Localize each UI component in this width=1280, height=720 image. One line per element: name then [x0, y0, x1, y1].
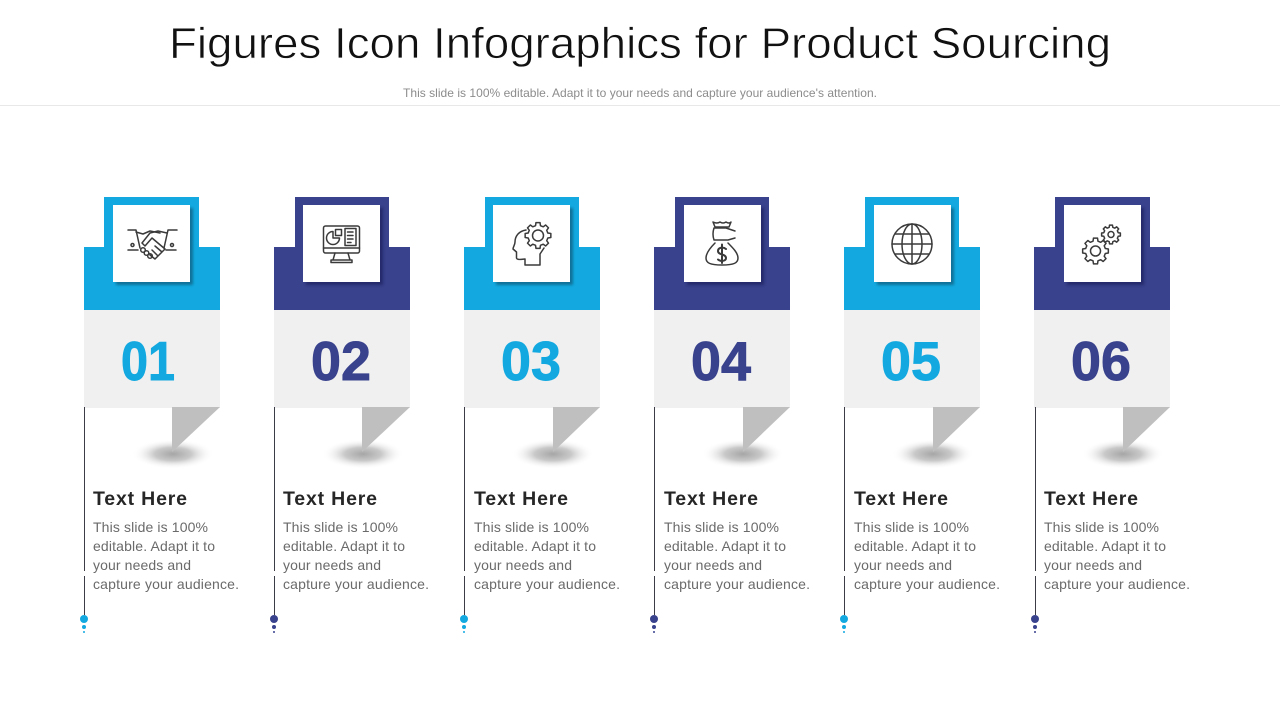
panel: step 05: [840, 197, 1000, 633]
colour tab: [1034, 197, 1170, 310]
icon: money bag in hand: [706, 222, 738, 265]
body text: [854, 519, 1000, 592]
timeline: [654, 407, 656, 615]
number block: [1034, 310, 1170, 408]
body text: editable. Adapt it to: [1044, 538, 1166, 554]
icon card: [303, 205, 380, 282]
number: 06: [1071, 330, 1131, 392]
body text: your needs and: [93, 557, 191, 573]
folded corner shadow: [512, 439, 594, 469]
title: Figures Icon Infographics for Product Sourcing: [169, 19, 1111, 68]
heading: Text Here: [664, 488, 758, 510]
icon: head with gear: [513, 223, 551, 265]
body text: editable. Adapt it to: [664, 538, 786, 554]
heading: Text Here: [283, 488, 377, 510]
body text: This slide is 100%: [1044, 519, 1159, 535]
folded corner: [553, 407, 600, 452]
number: 02: [311, 330, 371, 392]
folded corner: [172, 407, 220, 452]
timeline: [1034, 407, 1036, 615]
body text: [474, 519, 620, 592]
folded corner: [362, 407, 410, 452]
icon card: [684, 205, 761, 282]
timeline: [844, 407, 846, 615]
icon: gears: [1083, 225, 1120, 264]
icon card: [113, 205, 190, 282]
timeline dots: [80, 615, 88, 633]
body text: capture your audience.: [283, 576, 429, 592]
body text: your needs and: [854, 557, 952, 573]
number block: [654, 310, 790, 408]
body text: capture your audience.: [93, 576, 239, 592]
colour tab: [844, 197, 980, 310]
body text: your needs and: [283, 557, 381, 573]
folded corner shadow: [1082, 439, 1164, 469]
folded corner: [1123, 407, 1170, 452]
body text: capture your audience.: [474, 576, 620, 592]
body text: editable. Adapt it to: [474, 538, 596, 554]
folded corner: [743, 407, 790, 452]
folded corner: [933, 407, 980, 452]
subtitle: This slide is 100% editable. Adapt it to your needs and capture your audience's attention.: [403, 86, 877, 100]
icon: handshake: [128, 230, 177, 259]
colour tab: [84, 197, 220, 310]
folded corner shadow: [322, 439, 404, 469]
body text: [93, 519, 239, 592]
panel: step 06: [1031, 197, 1190, 633]
timeline: [274, 407, 276, 615]
number: 01: [121, 330, 175, 392]
timeline: [464, 407, 466, 615]
body text: [1044, 519, 1190, 592]
icon card shadow: [687, 208, 764, 285]
timeline dots: [840, 615, 848, 633]
body text: [664, 519, 810, 592]
body text: capture your audience.: [854, 576, 1000, 592]
timeline dots: [650, 615, 658, 633]
colour tab: [464, 197, 600, 310]
colour tab: [654, 197, 790, 310]
body text: This slide is 100%: [283, 519, 398, 535]
icon: monitor with charts: [324, 226, 360, 262]
body text: This slide is 100%: [854, 519, 969, 535]
timeline dots: [1031, 615, 1039, 633]
folded corner shadow: [892, 439, 974, 469]
body text: your needs and: [1044, 557, 1142, 573]
icon card shadow: [116, 208, 193, 285]
folded corner shadow: [702, 439, 784, 469]
body text: This slide is 100%: [474, 519, 589, 535]
heading: Text Here: [854, 488, 948, 510]
number block: [84, 310, 220, 408]
body text: your needs and: [664, 557, 762, 573]
folded corner shadow: [132, 439, 214, 469]
icon card: [493, 205, 570, 282]
number: 04: [691, 330, 751, 392]
number block: [464, 310, 600, 408]
panel: step 01: [80, 197, 239, 633]
number: 05: [881, 330, 941, 392]
body text: This slide is 100%: [664, 519, 779, 535]
body text: capture your audience.: [664, 576, 810, 592]
timeline dots: [460, 615, 468, 633]
timeline dots: [270, 615, 278, 633]
icon card: [1064, 205, 1141, 282]
panel: step 04: [650, 197, 810, 633]
icon card shadow: [306, 208, 383, 285]
icon: globe: [892, 224, 932, 264]
heading: Text Here: [93, 488, 187, 510]
number block: [274, 310, 410, 408]
body text: [283, 519, 429, 592]
colour tab: [274, 197, 410, 310]
icon card shadow: [877, 208, 954, 285]
heading: Text Here: [1044, 488, 1138, 510]
number block: [844, 310, 980, 408]
body text: capture your audience.: [1044, 576, 1190, 592]
panel: step 02: [270, 197, 429, 633]
body text: editable. Adapt it to: [93, 538, 215, 554]
number: 03: [501, 330, 561, 392]
timeline: [84, 407, 86, 615]
panel: step 03: [460, 197, 620, 633]
icon card shadow: [496, 208, 573, 285]
body text: editable. Adapt it to: [283, 538, 405, 554]
heading: Text Here: [474, 488, 568, 510]
icon card shadow: [1067, 208, 1144, 285]
body text: your needs and: [474, 557, 572, 573]
icon card: [874, 205, 951, 282]
body text: This slide is 100%: [93, 519, 208, 535]
body text: editable. Adapt it to: [854, 538, 976, 554]
